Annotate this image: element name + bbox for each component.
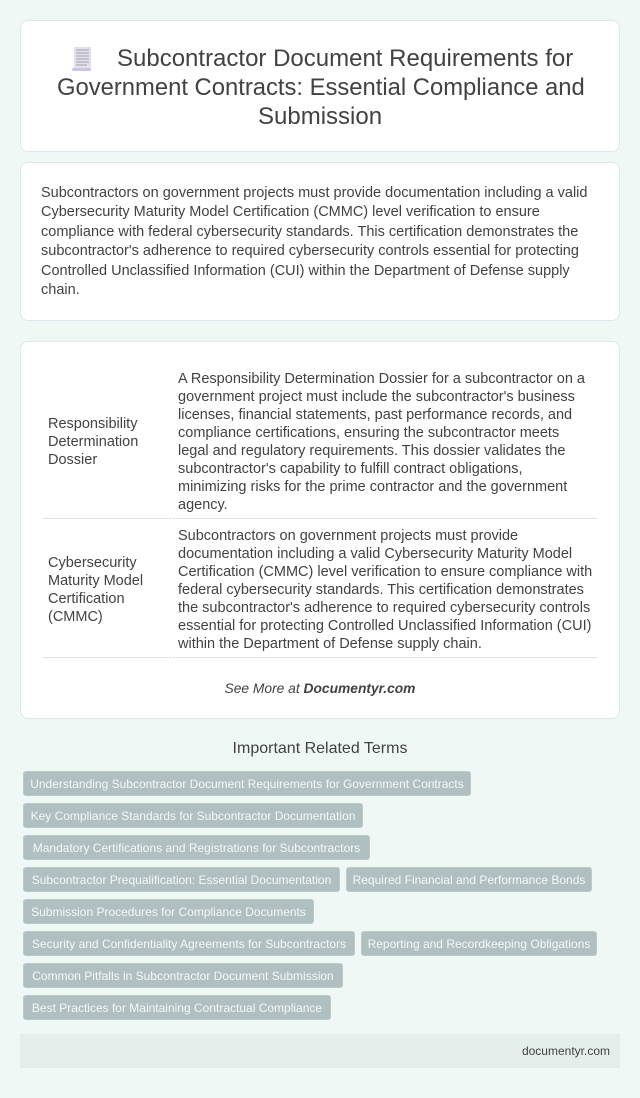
icon: document scroll — [72, 47, 91, 71]
row description: government project must include the subcontractor's business — [178, 389, 575, 405]
related terms tags: Submission Procedures for Compliance Documents — [31, 905, 306, 919]
intro text — [41, 185, 587, 298]
footer — [20, 1034, 620, 1068]
table panel — [20, 341, 620, 719]
related terms tags: Reporting and Recordkeeping Obligations — [368, 937, 590, 951]
title: Submission — [258, 103, 382, 130]
related terms heading: Important Related Terms — [233, 740, 407, 757]
row description: licenses, financial statements, past performance records, and — [178, 407, 572, 423]
row description: legal and regulatory requirements. This dossier validates the — [178, 443, 565, 459]
row label: Cybersecurity — [48, 555, 137, 571]
related terms tags: Understanding Subcontractor Document Requirements for Government Contracts — [30, 777, 464, 791]
title: Government Contracts: Essential Compliance and — [57, 74, 585, 101]
title — [57, 45, 585, 130]
row description: documentation including a valid Cybersecurity Maturity Model — [178, 546, 572, 562]
header panel — [20, 20, 620, 152]
row description: minimizing risks for the prime contractor and the government — [178, 479, 567, 495]
related terms tags: Security and Confidentiality Agreements for Subcontractors — [32, 937, 346, 951]
intro text: chain. — [41, 282, 80, 298]
see more link: See More at Documentyr.com — [225, 681, 415, 696]
title: Subcontractor Document Requirements for — [117, 45, 573, 72]
intro text: Controlled Unclassified Information (CUI) within the Department of Defense supply — [41, 263, 570, 279]
row description: the subcontractor's adherence to required cybersecurity controls — [178, 600, 590, 616]
row label: Maturity Model — [48, 573, 143, 589]
related terms tags: Common Pitfalls in Subcontractor Document Submission — [32, 969, 334, 983]
related terms tags: Subcontractor Prequalification: Essential Documentation — [32, 873, 331, 887]
row label: Responsibility — [48, 416, 137, 432]
intro text: Subcontractors on government projects must provide documentation including a valid — [41, 185, 587, 201]
footer: documentyr.com — [522, 1044, 610, 1058]
row description: subcontractor's capability to fulfill contract obligations, — [178, 461, 522, 477]
row description: Subcontractors on government projects must provide — [178, 528, 518, 544]
related terms tags: Mandatory Certifications and Registrations for Subcontractors — [33, 841, 360, 855]
row label: Dossier — [48, 452, 97, 468]
table row: Responsibility Determination Dossier — [48, 371, 585, 513]
row description: Certification (CMMC) level verification to ensure compliance with — [178, 564, 592, 580]
row label: (CMMC) — [48, 609, 103, 625]
intro text: Cybersecurity Maturity Model Certification (CMMC) level verification to ensure — [41, 204, 540, 220]
row description: federal cybersecurity standards. This certification demonstrates — [178, 582, 584, 598]
intro panel — [20, 162, 620, 321]
row description — [178, 371, 585, 513]
related terms tags: Required Financial and Performance Bonds — [353, 873, 585, 887]
row description: compliance certifications, ensuring the subcontractor meets — [178, 425, 559, 441]
related terms tags: Key Compliance Standards for Subcontractor Documentation — [31, 809, 355, 823]
row label — [48, 416, 138, 468]
row description: within the Department of Defense supply chain. — [178, 636, 482, 652]
related terms tags: Best Practices for Maintaining Contractual Compliance — [32, 1001, 322, 1015]
row label: Certification — [48, 591, 125, 607]
row description: A Responsibility Determination Dossier for a subcontractor on a — [178, 371, 585, 387]
row description: agency. — [178, 497, 228, 513]
related terms tags — [23, 771, 597, 1020]
table row: CMMC — [48, 528, 592, 652]
row label: Determination — [48, 434, 138, 450]
row description — [178, 528, 592, 652]
row label — [48, 555, 143, 625]
intro text: compliance with federal cybersecurity standards. This certification demonstrates the — [41, 224, 578, 240]
row description: essential for protecting Controlled Unclassified Information (CUI) — [178, 618, 591, 634]
intro text: subcontractor's adherence to required cybersecurity controls essential for protecting — [41, 243, 579, 259]
